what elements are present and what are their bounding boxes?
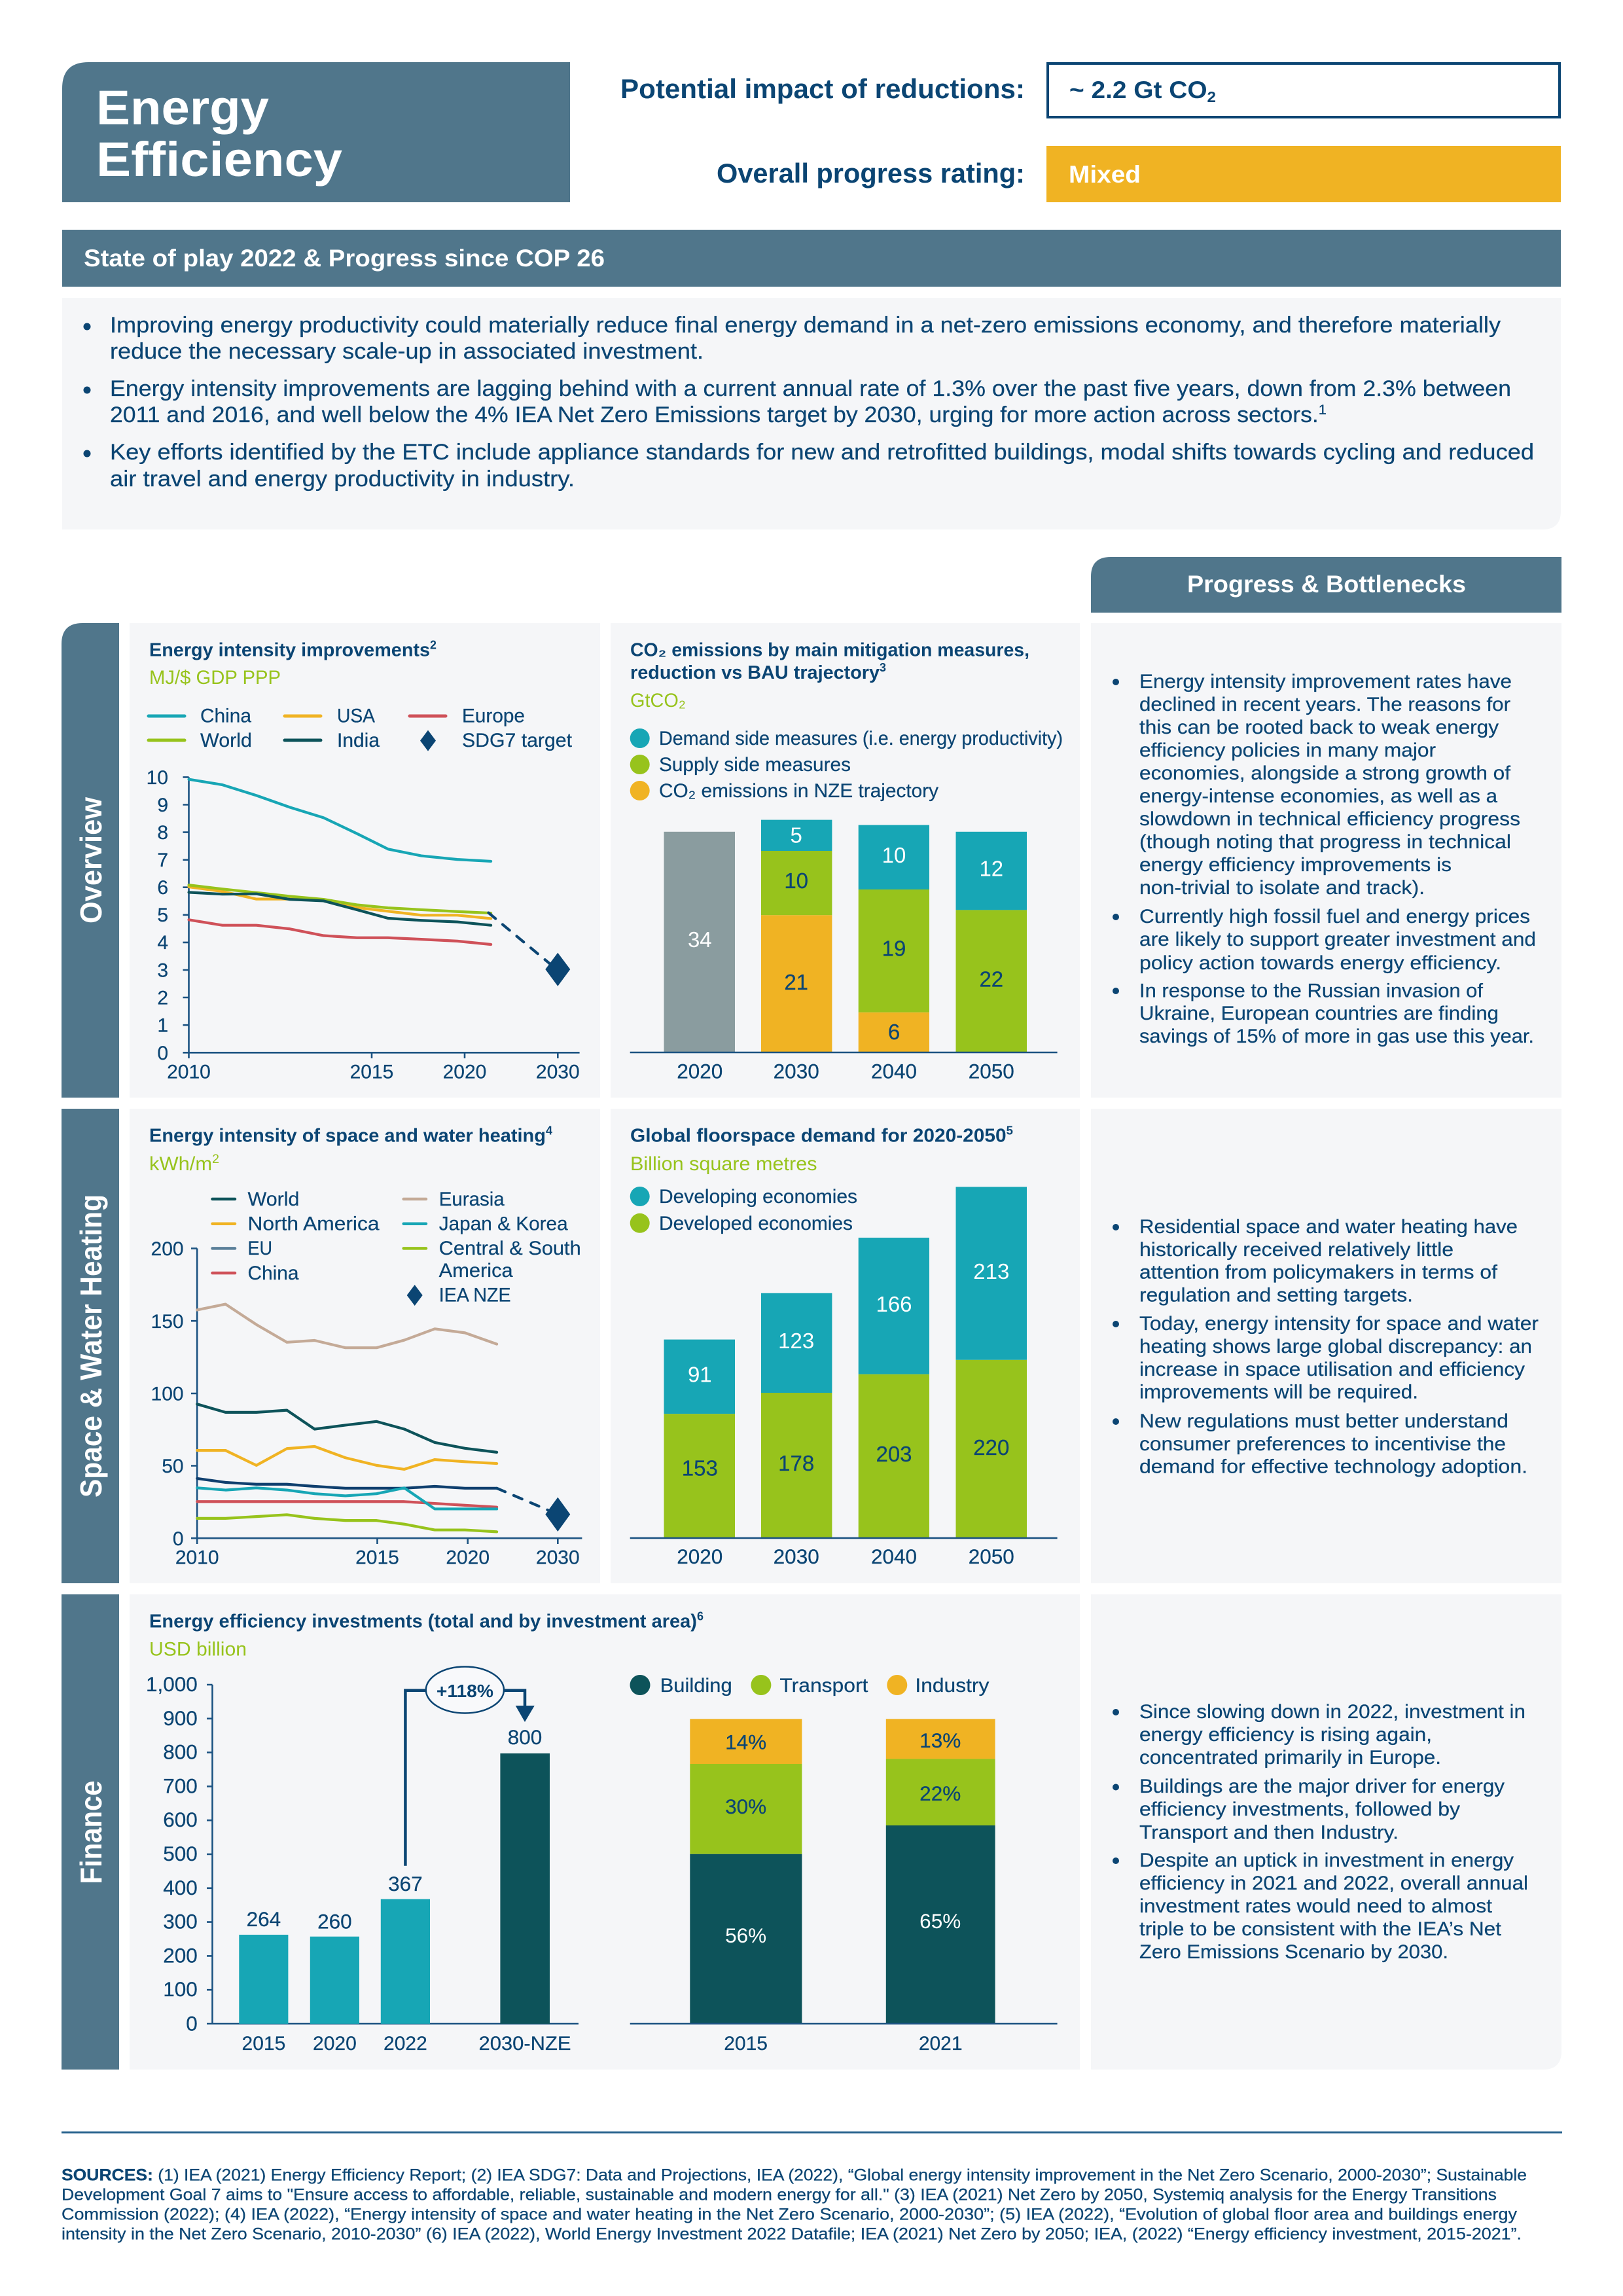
axes: 2010 — [167, 1061, 211, 1083]
legend: America — [439, 1260, 513, 1282]
panel: global floorspace demand stacked bars — [611, 1109, 1080, 1583]
panel: space and water heating commentary: demand for effective technology adoption. — [1139, 1456, 1527, 1478]
axes: 8 — [157, 822, 168, 844]
axes: 700 — [163, 1774, 198, 1797]
bar 2040: 6 — [888, 1020, 900, 1044]
sources — [62, 2166, 1527, 2244]
bar 2015: 264 — [247, 1907, 281, 1931]
axes: 4 — [157, 932, 168, 954]
chart heading: 3 — [880, 661, 886, 674]
panel: finance commentary: investment rates would need to almost — [1139, 1895, 1493, 1917]
panel: energy intensity of space and water heating line chart — [130, 1109, 600, 1583]
bar 2030 — [761, 1293, 832, 1538]
bar 2020 — [310, 1910, 359, 2024]
chart heading: 6 — [697, 1610, 704, 1623]
bar 2050: 22 — [979, 967, 1003, 992]
panel: space and water heating commentary: Residential space and water heating have — [1139, 1216, 1518, 1238]
legend: Developing economies — [659, 1186, 857, 1208]
bar 2030: 10 — [784, 869, 808, 893]
panel: state of play bullets: Energy intensity improvements are lagging behind with a current annual rate of 1.3% over the past five years, down from 2.3% between — [110, 376, 1511, 401]
panel: space and water heating commentary: New regulations must better understand — [1139, 1410, 1508, 1432]
x axis: 2020 — [677, 1545, 722, 1568]
legend: SDG7 target — [462, 730, 573, 751]
panel: space and water heating commentary: attention from policymakers in terms of — [1139, 1262, 1498, 1283]
panel: space and water heating commentary: heating shows large global discrepancy: an — [1139, 1336, 1532, 1357]
x axis: 2020 — [677, 1059, 722, 1083]
heading: state of play — [62, 230, 1561, 287]
axes: 0 — [186, 2011, 198, 2035]
progress rating — [717, 146, 1561, 202]
axes: 2022 — [383, 2033, 427, 2054]
legend: IEA NZE — [439, 1284, 511, 1306]
legend: Developed economies — [659, 1213, 853, 1234]
bar 2030-NZE — [500, 1725, 550, 2024]
bar 2050 — [955, 832, 1027, 1052]
bar 2020 — [664, 1340, 735, 1538]
panel: space and water heating commentary: Today, energy intensity for space and water — [1139, 1313, 1539, 1335]
legend: USA — [337, 706, 375, 727]
x axis: 2040 — [871, 1059, 917, 1083]
bar 2040: 10 — [882, 843, 906, 867]
bar share 2021: 65% — [919, 1909, 961, 1933]
axes: 50 — [162, 1456, 184, 1477]
bar 2040: 166 — [876, 1292, 912, 1316]
chart unit: USD billion — [149, 1638, 247, 1660]
sources: Development Goal 7 aims to "Ensure access to affordable, reliable, sustainable and modern energy for all." (3) IEA (2021) Net Zero by 2050, Systemiq analysis for the Energy Transitions — [62, 2186, 1497, 2204]
axes: 7 — [157, 850, 168, 871]
panel: overview commentary: non-trivial to isolate and track). — [1139, 877, 1425, 899]
side tab: finance — [62, 1594, 119, 2070]
chart heading: reduction vs BAU trajectory — [630, 662, 882, 683]
panel: space and water heating commentary: consumer preferences to incentivise the — [1139, 1433, 1506, 1455]
panel: overview commentary: Ukraine, European countries are finding — [1139, 1003, 1499, 1024]
bar 2050 — [955, 1187, 1027, 1538]
panel: space and water heating commentary — [1091, 1109, 1561, 1583]
chart heading: Global floorspace demand for 2020-2050 — [630, 1126, 995, 1147]
panel: overview commentary: energy-intense economies, as well as a — [1139, 785, 1497, 807]
axes: 2010 — [175, 1547, 219, 1569]
legend: Building — [660, 1675, 732, 1696]
axes: 0 — [157, 1043, 168, 1064]
chart heading: 5 — [1007, 1124, 1013, 1138]
panel: space and water heating commentary: improvements will be required. — [1139, 1381, 1418, 1403]
chart unit: Billion square metres — [630, 1153, 817, 1175]
bar 2020 — [664, 832, 735, 1052]
panel: finance commentary: efficiency investments, followed by — [1139, 1799, 1460, 1820]
panel: finance commentary: concentrated primarily in Europe. — [1139, 1747, 1441, 1768]
bar 2020: 34 — [688, 927, 712, 952]
panel: finance commentary — [1091, 1594, 1561, 2070]
side tab: overview — [62, 623, 119, 1098]
impact of reductions — [620, 63, 1560, 117]
axes: 500 — [163, 1842, 198, 1865]
axes: 100 — [151, 1384, 184, 1405]
bar 2022 — [381, 1872, 430, 2024]
axes: 2030-NZE — [479, 2033, 571, 2054]
legend — [212, 1189, 581, 1306]
legend: Europe — [462, 706, 525, 727]
bar 2020: 91 — [688, 1362, 712, 1386]
legend — [149, 706, 573, 751]
legend: World — [247, 1189, 300, 1210]
panel: overview commentary: savings of 15% of more in gas use this year. — [1139, 1026, 1534, 1047]
axes: 1,000 — [146, 1672, 198, 1696]
axes: 2020 — [443, 1061, 486, 1083]
panel: energy efficiency investments — [130, 1594, 1080, 2070]
panel: overview commentary: policy action towards energy efficiency. — [1139, 952, 1501, 974]
legend: China — [200, 706, 251, 727]
x axis: 2030 — [774, 1059, 819, 1083]
title: Efficiency — [96, 132, 342, 187]
panel: overview commentary: In response to the Russian invasion of — [1139, 980, 1484, 1001]
heading: progress and bottlenecks: Progress & Bottlenecks — [1187, 571, 1466, 598]
axes — [146, 1672, 579, 2054]
chart heading: 2 — [430, 639, 437, 652]
axes: 5 — [157, 905, 168, 926]
axes: 400 — [163, 1876, 198, 1899]
panel: space and water heating commentary: regulation and setting targets. — [1139, 1284, 1413, 1306]
sources: intensity in the Net Zero Scenario, 2010-2030” (6) IEA (2022), World Energy Investment 2022 Datafile; IEA (2021) Net Zero by 2050; IEA, (2022) “Energy efficiency investment, 2015-2021”. — [62, 2225, 1522, 2244]
impact of reductions: Potential impact of reductions: — [620, 73, 1025, 104]
axes: 2030 — [536, 1061, 580, 1083]
legend — [630, 728, 1063, 802]
bar share 2015: 14% — [725, 1730, 766, 1753]
x axis — [630, 1538, 1058, 1568]
bar 2040: 203 — [876, 1442, 912, 1466]
panel: finance commentary: Since slowing down in 2022, investment in — [1139, 1701, 1525, 1723]
legend: Japan & Korea — [439, 1213, 568, 1234]
data lines — [189, 780, 551, 965]
x axis — [630, 1052, 1058, 1083]
axes: 200 — [163, 1943, 198, 1967]
panel: overview commentary: slowdown in technical efficiency progress — [1139, 808, 1520, 830]
bar 2020: 153 — [682, 1456, 718, 1480]
chart heading: Energy efficiency investments (total and by investment area) — [149, 1611, 696, 1632]
x axis: 2030 — [774, 1545, 819, 1568]
axes: 150 — [151, 1311, 184, 1333]
bar 2040: 19 — [882, 937, 906, 961]
bar 2050: 220 — [973, 1435, 1009, 1460]
bar 2022: 367 — [388, 1872, 423, 1895]
axes: 3 — [157, 960, 168, 982]
panel: overview commentary — [1091, 623, 1561, 1098]
bar share 2015: 56% — [725, 1924, 766, 1947]
panel: CO2 emissions by mitigation measures stacked bars — [611, 623, 1080, 1098]
legend: EU — [247, 1238, 272, 1259]
panel: finance commentary: Buildings are the major driver for energy — [1139, 1776, 1505, 1797]
axes: 2015 — [242, 2033, 285, 2054]
legend — [630, 1186, 857, 1234]
bar 2020: 260 — [317, 1910, 352, 1933]
panel: state of play bullets: Key efforts identified by the ETC include appliance standards for new and retrofitted buildings, modal shifts towards cycling and reduced — [110, 440, 1534, 465]
chart heading: Energy intensity improvements — [149, 640, 432, 661]
IEA NZE marker — [545, 1498, 570, 1532]
bar share 2021: 13% — [919, 1729, 961, 1752]
impact of reductions: 2 — [1207, 88, 1216, 105]
bar share 2021 — [886, 1719, 995, 2024]
panel: state of play bullets: reduce the necessary scale-up in associated investment. — [110, 339, 704, 364]
panel: finance commentary: triple to be consistent with the IEA’s Net — [1139, 1918, 1502, 1940]
SDG7 target marker — [545, 953, 570, 986]
x axis — [630, 2024, 1058, 2054]
panel: overview commentary: Energy intensity improvement rates have — [1139, 671, 1512, 692]
chart heading: 4 — [546, 1124, 552, 1138]
legend: Central & South — [439, 1238, 581, 1259]
axes: 2030 — [536, 1547, 580, 1569]
panel: space and water heating commentary: historically received relatively little — [1139, 1239, 1454, 1261]
x axis: 2040 — [871, 1545, 917, 1568]
axes: 2 — [157, 987, 168, 1009]
bar 2050: 12 — [979, 857, 1003, 881]
heading: state of play: State of play 2022 & Progress since COP 26 — [84, 245, 605, 272]
panel: state of play bullets: 2011 and 2016, and well below the 4% IEA Net Zero Emissions target by 2030, urging for more action across sectors. — [110, 403, 1265, 427]
axes: 0 — [173, 1528, 184, 1550]
bar 2030: 21 — [784, 970, 808, 994]
side tab: finance: Finance — [74, 1780, 108, 1884]
side tab: space and water heating: Space & Water Heating — [74, 1194, 108, 1498]
sources: Commission (2022); (4) IEA (2022), “Energy intensity of space and water heating in the Net Zero Scenario, 2000-2030”; (5) IEA (2022), “Evolution of global floor area and buildings energy — [62, 2206, 1518, 2224]
panel: finance commentary: Despite an uptick in investment in energy — [1139, 1850, 1514, 1871]
panel: overview commentary: Currently high fossil fuel and energy prices — [1139, 906, 1530, 927]
chart unit: MJ/$ GDP PPP — [149, 667, 281, 689]
panel: overview commentary: are likely to support greater investment and — [1139, 929, 1536, 950]
legend: China — [247, 1263, 299, 1284]
panel: finance commentary: efficiency in 2021 and 2022, overall annual — [1139, 1873, 1528, 1894]
axes: 1 — [157, 1015, 168, 1037]
axes — [147, 767, 580, 1083]
bar share 2021: 22% — [919, 1782, 961, 1805]
chart unit: GtCO₂ — [630, 690, 686, 711]
bar 2030: 178 — [778, 1451, 814, 1475]
bar 2030: 123 — [778, 1329, 814, 1353]
bar 2015 — [239, 1907, 288, 2024]
bar 2040 — [859, 825, 929, 1052]
axes: 900 — [163, 1706, 198, 1730]
panel: state of play bullets — [62, 298, 1561, 529]
legend — [630, 1675, 989, 1696]
legend: World — [200, 730, 252, 751]
x axis: 2050 — [969, 1059, 1014, 1083]
x axis: 2021 — [919, 2033, 963, 2054]
panel: overview commentary: this can be rooted back to weak energy — [1139, 717, 1499, 738]
heading: progress and bottlenecks — [1091, 557, 1561, 613]
panel: state of play bullets: air travel and energy productivity in industry. — [110, 467, 575, 492]
chart unit: 2 — [212, 1153, 219, 1166]
panel: finance commentary: Transport and then Industry. — [1139, 1822, 1399, 1843]
bar 2030: 5 — [791, 823, 802, 847]
bar 2040 — [859, 1238, 929, 1538]
axes: 6 — [157, 877, 168, 899]
impact of reductions: ~ 2.2 Gt CO — [1069, 77, 1200, 103]
legend: Supply side measures — [659, 754, 851, 776]
legend: Demand side measures (i.e. energy productivity) — [659, 728, 1063, 749]
panel: energy intensity improvements line chart — [130, 623, 600, 1098]
chart heading: CO₂ emissions by main mitigation measures, — [630, 640, 1029, 661]
axes: 800 — [163, 1740, 198, 1764]
axes: 9 — [157, 795, 168, 816]
legend: Transport — [779, 1675, 868, 1696]
title: Energy — [96, 81, 269, 135]
chart unit: kWh/m — [149, 1153, 210, 1175]
panel: overview commentary: (though noting that progress in technical — [1139, 831, 1511, 853]
progress rating: Mixed — [1069, 161, 1141, 188]
axes: 10 — [147, 767, 168, 789]
panel: finance commentary: Zero Emissions Scenario by 2030. — [1139, 1941, 1448, 1963]
panel: finance commentary: energy efficiency is rising again, — [1139, 1724, 1432, 1746]
title — [62, 62, 570, 202]
bar 2050: 213 — [973, 1259, 1009, 1283]
panel: overview commentary: efficiency policies in many major — [1139, 740, 1436, 761]
bar share 2015: 30% — [725, 1795, 766, 1818]
axes: 100 — [163, 1977, 198, 2001]
side tab: space and water heating — [62, 1109, 119, 1583]
panel: overview commentary: energy efficiency improvements is — [1139, 854, 1452, 876]
sources: SOURCES: (1) IEA (2021) Energy Efficiency Report; (2) IEA SDG7: Data and Projections, IEA (2022), “Global energy intensity improvement in the Net Zero Scenario, 2000-2030”; Sustainable — [62, 2166, 1527, 2185]
axes: 2015 — [355, 1547, 399, 1569]
legend: India — [337, 730, 380, 751]
x axis: 2015 — [724, 2033, 768, 2054]
side tab: overview: Overview — [74, 797, 108, 924]
arrow: +118% callout: +118% — [437, 1681, 493, 1701]
axes: 2020 — [446, 1547, 490, 1569]
panel: state of play bullets: 1 — [1319, 403, 1327, 418]
panel: overview commentary: declined in recent years. The reasons for — [1139, 694, 1510, 715]
arrow: +118% callout — [405, 1666, 535, 1866]
legend: North America — [247, 1213, 380, 1234]
axes: 300 — [163, 1910, 198, 1933]
axes: 2015 — [350, 1061, 393, 1083]
axes: 200 — [151, 1238, 184, 1260]
data lines — [197, 1304, 551, 1532]
panel: overview commentary: economies, alongside a strong growth of — [1139, 762, 1511, 784]
axes: 600 — [163, 1808, 198, 1831]
legend: CO₂ emissions in NZE trajectory — [659, 780, 938, 802]
panel: state of play bullets: Improving energy productivity could materially reduce final energy demand in a net-zero emissions economy, and therefore materially — [110, 313, 1501, 338]
axes: 2020 — [313, 2033, 357, 2054]
legend: Industry — [915, 1675, 989, 1696]
panel: space and water heating commentary: increase in space utilisation and efficiency — [1139, 1359, 1525, 1380]
chart heading: Energy intensity of space and water heating — [149, 1126, 546, 1147]
chart heading — [630, 640, 1029, 683]
bar share 2015 — [690, 1719, 802, 2024]
progress rating: Overall progress rating: — [717, 158, 1025, 188]
bar 2030 — [761, 820, 832, 1052]
x axis: 2050 — [969, 1545, 1014, 1568]
axes — [151, 1238, 582, 1569]
legend: Eurasia — [439, 1189, 505, 1210]
bar 2030-NZE: 800 — [508, 1725, 542, 1749]
